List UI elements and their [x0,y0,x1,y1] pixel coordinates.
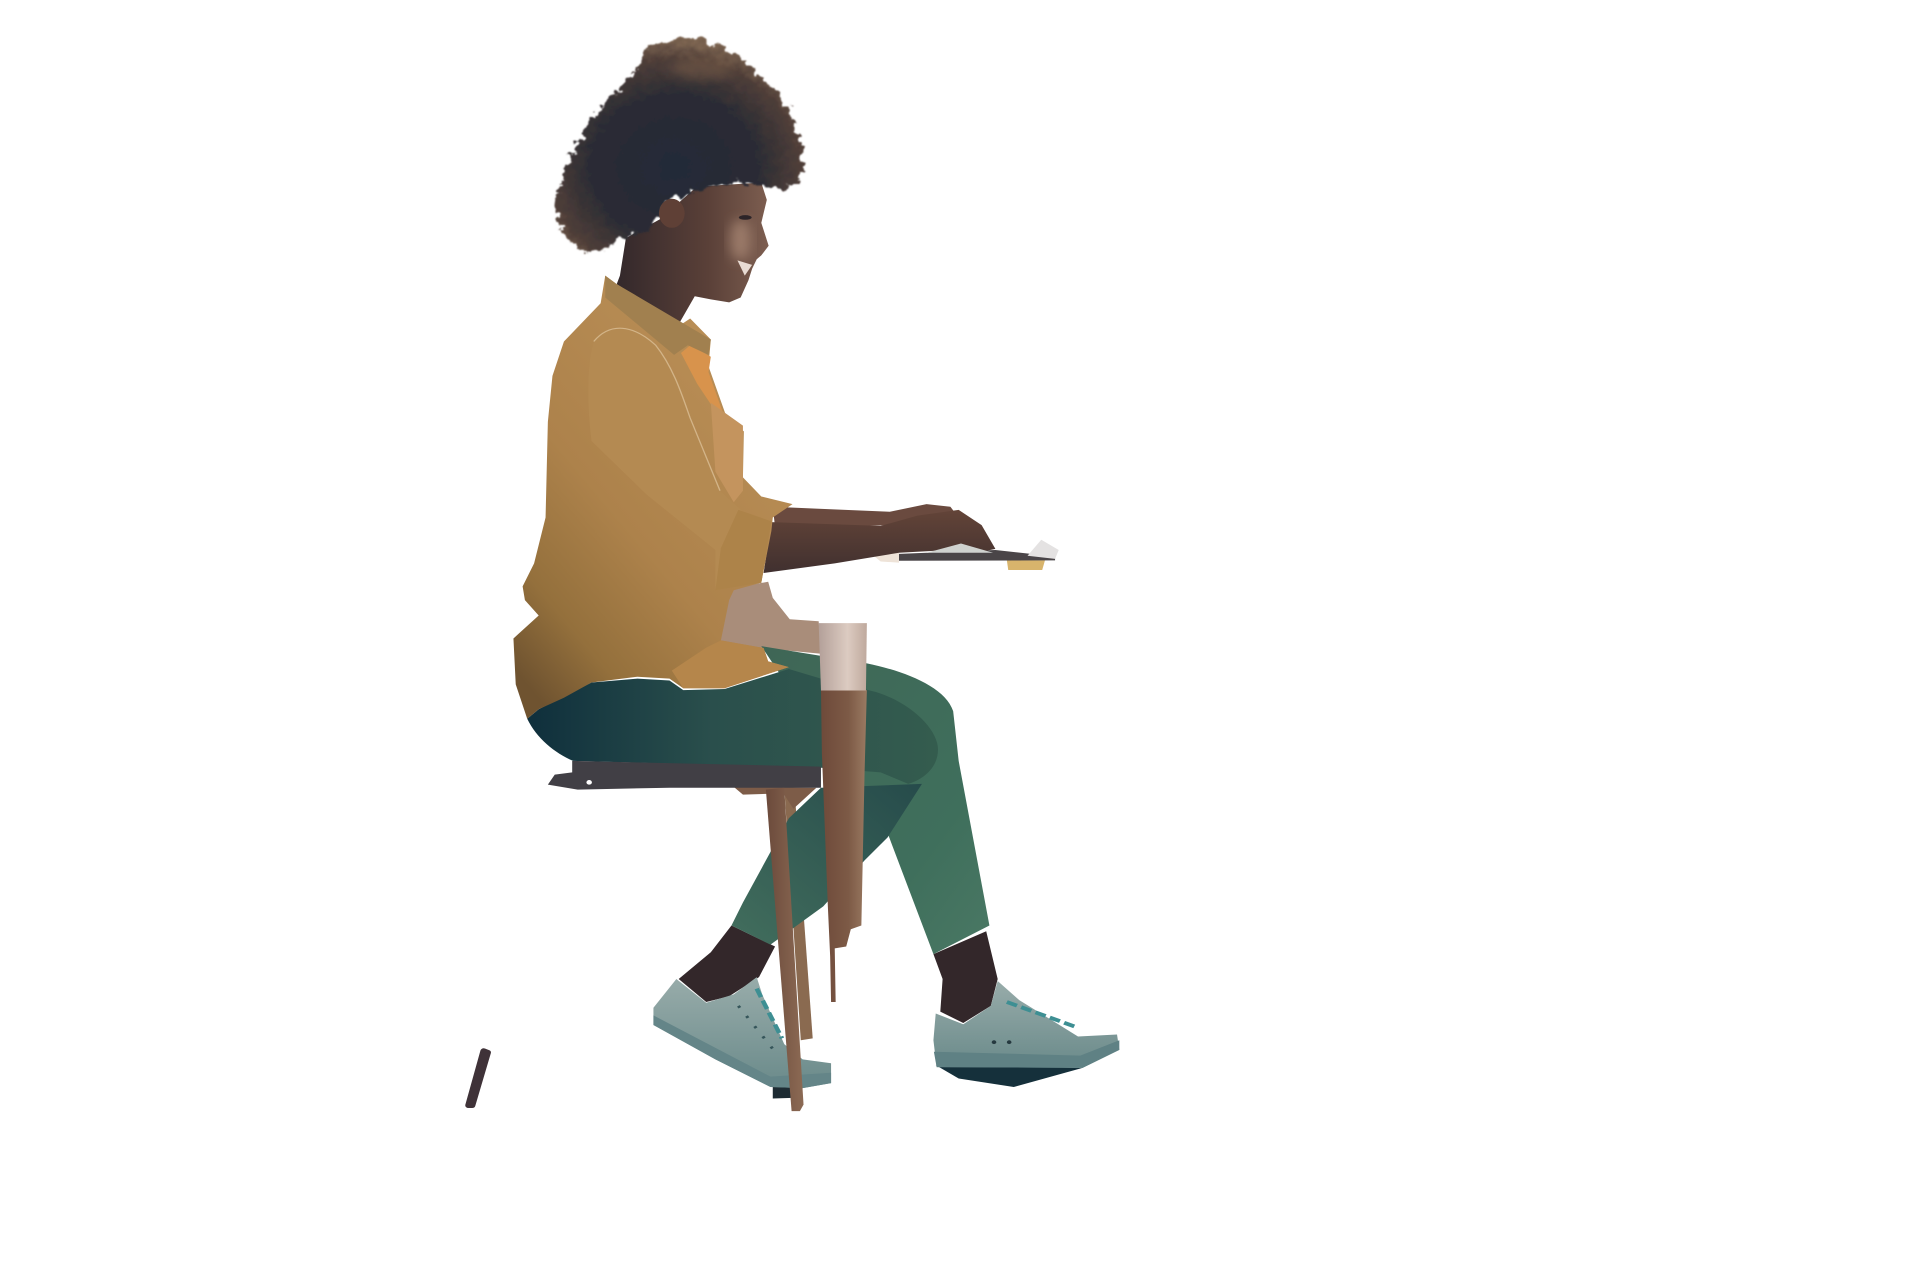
far ankle [933,931,998,1023]
far arm [773,504,959,527]
chair seat [548,761,821,809]
smile [737,260,752,276]
shirt [513,276,793,719]
lower body: legs, chair and table leg [468,582,1119,1111]
sleeve [588,328,771,590]
pen on floor [468,1051,488,1105]
near ankle [679,925,775,1002]
papers under laptop [871,540,1059,570]
ear [659,199,685,228]
near shin [731,784,922,945]
hair crown highlight [670,56,734,79]
cuff [715,510,771,590]
shirt placket [681,345,725,420]
far shoe [933,981,1119,1087]
far leg [761,646,989,954]
front chair leg [766,788,804,1111]
wooden background patch [715,582,821,654]
table leg [819,623,867,1002]
cheek highlight [731,219,751,261]
hair [556,39,802,252]
head and neck [617,183,769,324]
near arm and hand [764,510,995,573]
eye [739,215,752,220]
near shoe [653,977,831,1098]
near thigh [527,669,938,784]
rear chair leg [784,788,813,1040]
laptop keys [927,544,993,553]
shirt tail [672,640,789,688]
collar [605,276,711,355]
